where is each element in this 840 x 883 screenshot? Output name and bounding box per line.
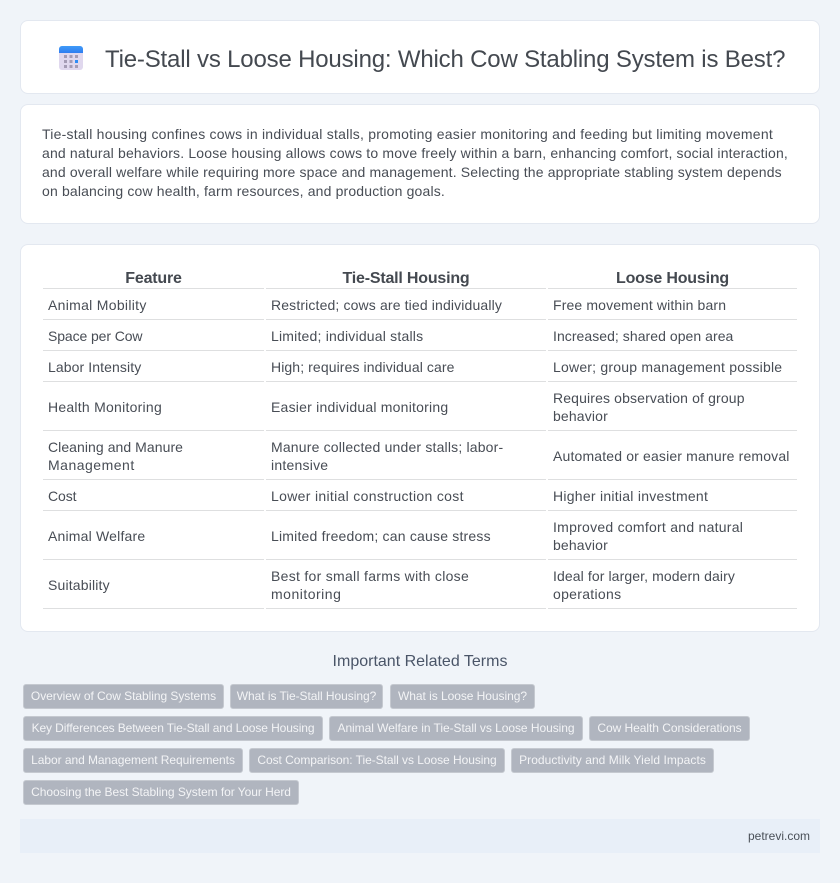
- table rows: Best for small farms with close: [271, 568, 469, 584]
- table rows: Animal Welfare: [48, 528, 145, 544]
- footer source: petrevi.com: [748, 829, 810, 843]
- table rows: Labor Intensity: [48, 359, 141, 375]
- table rows: Health Monitoring: [48, 399, 162, 415]
- title: Tie-Stall vs Loose Housing: Which Cow Stabling System is Best?: [105, 46, 785, 73]
- table rows: behavior: [553, 537, 608, 553]
- table rows: Automated or easier manure removal: [553, 448, 790, 464]
- intro text: on balancing cow health, farm resources, and production goals.: [42, 183, 445, 199]
- table rows: Space per Cow: [48, 328, 142, 344]
- table rows: operations: [553, 586, 621, 602]
- table rows: monitoring: [271, 586, 341, 602]
- related term tags: Choosing the Best Stabling System for Your Herd: [31, 785, 291, 799]
- table rows: Ideal for larger, modern dairy: [553, 568, 735, 584]
- related term tags: Cost Comparison: Tie-Stall vs Loose Housing: [257, 753, 497, 767]
- intro text: Tie-stall housing confines cows in individual stalls, promoting easier monitoring and feeding but limiting movement: [42, 126, 773, 142]
- table rows: Free movement within barn: [553, 297, 726, 313]
- icon: calendar: [59, 46, 83, 70]
- table rows: Cost: [48, 488, 76, 504]
- table rows: Cleaning and Manure: [48, 439, 183, 455]
- related terms heading: Important Related Terms: [333, 653, 507, 670]
- related term tags: [23, 684, 750, 805]
- related term tags: Overview of Cow Stabling Systems: [31, 689, 216, 703]
- table rows: High; requires individual care: [271, 359, 455, 375]
- table rows: [43, 288, 797, 609]
- related term tags: Productivity and Milk Yield Impacts: [519, 753, 706, 767]
- table rows: Management: [48, 457, 135, 473]
- table header: [125, 270, 729, 287]
- comparison table card: [20, 244, 820, 632]
- table rows: Higher initial investment: [553, 488, 708, 504]
- related term tags: What is Loose Housing?: [398, 689, 527, 703]
- related term tags: Animal Welfare in Tie-Stall vs Loose Housing: [337, 721, 575, 735]
- table rows: Improved comfort and natural: [553, 519, 743, 535]
- table header: Tie-Stall Housing: [342, 270, 469, 287]
- table rows: Restricted; cows are tied individually: [271, 297, 502, 313]
- intro card: [20, 104, 820, 224]
- table rows: intensive: [271, 457, 328, 473]
- table rows: Easier individual monitoring: [271, 399, 448, 415]
- table header: Feature: [125, 270, 182, 287]
- table rows: Animal Mobility: [48, 297, 147, 313]
- table rows: Lower initial construction cost: [271, 488, 464, 504]
- related term tags: Key Differences Between Tie-Stall and Loose Housing: [32, 721, 314, 735]
- table rows: Suitability: [48, 577, 110, 593]
- table rows: Manure collected under stalls; labor-: [271, 439, 503, 455]
- related term tags: Labor and Management Requirements: [31, 753, 235, 767]
- table rows: Requires observation of group: [553, 390, 745, 406]
- table rows: Limited; individual stalls: [271, 328, 423, 344]
- table rows: behavior: [553, 408, 608, 424]
- header card: [20, 20, 820, 94]
- table rows: Lower; group management possible: [553, 359, 782, 375]
- table header: Loose Housing: [616, 270, 729, 287]
- table rows: Increased; shared open area: [553, 328, 733, 344]
- intro text: [42, 126, 788, 199]
- footer bar: [20, 819, 820, 853]
- table rows: Limited freedom; can cause stress: [271, 528, 491, 544]
- related term tags: Cow Health Considerations: [597, 721, 742, 735]
- intro text: and natural behaviors. Loose housing allows cows to move freely within a barn, enhancing comfort, social interaction,: [42, 145, 788, 161]
- intro text: and overall welfare while requiring more space and management. Selecting the appropriate stabling system depends: [42, 164, 782, 180]
- related term tags: What is Tie-Stall Housing?: [237, 689, 376, 703]
